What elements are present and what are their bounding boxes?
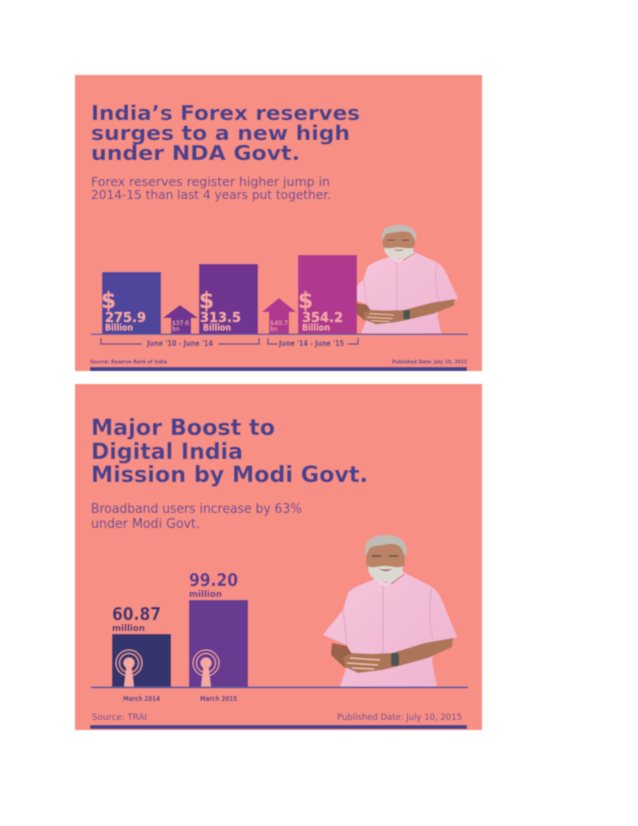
- panel: digital India: [75, 384, 482, 730]
- heading: forex reserves: surges to a new high: [91, 121, 350, 145]
- bar: 354.2 billion: 354.2: [302, 310, 343, 326]
- published date: digital India: Published Date: July 10, 2015: [337, 713, 462, 723]
- heading: digital India: Digital India: [91, 440, 243, 465]
- arrow: +$37.6 bn: [163, 305, 198, 334]
- subheading: digital India: Broadband users increase by 63%: [91, 502, 302, 517]
- icon: broadband tower: [193, 650, 219, 687]
- bar: 99.20 million, March 2015: 99.20: [189, 570, 238, 591]
- heading: digital India: [91, 416, 368, 488]
- axis label: March 2015: March 2015: [200, 695, 237, 703]
- bar: 60.87 million, March 2014: million: [112, 624, 145, 634]
- bar: 313.5 billion: Billion: [203, 324, 231, 334]
- heading: forex reserves: India’s Forex reserves: [91, 101, 360, 125]
- bar: 275.9 billion: [101, 272, 161, 334]
- bar: 60.87 million, March 2014: 60.87: [112, 604, 161, 625]
- footer bar: digital India: [90, 725, 467, 729]
- source note: forex: Source: Reserve Bank of India: [90, 360, 167, 366]
- arrow: +$40.7 bn: bn: [270, 326, 278, 333]
- bracket: June '14 - June '15: June '14 - June '15: [278, 339, 344, 348]
- heading: digital India: Mission by Modi Govt.: [91, 463, 368, 488]
- bracket: June '10 - June '14: June '10 - June '14: [146, 339, 213, 348]
- arrow: +$37.6 bn: $37.6: [172, 320, 189, 327]
- bar: 354.2 billion: [298, 255, 357, 334]
- published date: forex: Published Date: July 10, 2015: [392, 360, 467, 366]
- photo: Modi, forex panel: [347, 225, 458, 334]
- subheading: forex reserves: 2014-15 than last 4 years put together.: [91, 188, 331, 202]
- bar: 313.5 billion: [199, 264, 258, 334]
- icon: broadband tower: [116, 650, 142, 687]
- bar: 354.2 billion: $: [298, 289, 313, 314]
- heading: forex reserves: under NDA Govt.: [91, 141, 300, 165]
- bar: 60.87 million, March 2014: [112, 604, 171, 687]
- arrow: +$40.7 bn: $40.7: [270, 320, 288, 327]
- heading: forex reserves: [91, 101, 360, 165]
- bracket: June '10 - June '14: [101, 338, 259, 348]
- bar: 313.5 billion: 313.5: [200, 310, 241, 326]
- panel: forex reserves: [75, 75, 482, 371]
- subheading: forex reserves: Forex reserves register higher jump in: [91, 175, 330, 189]
- bar: 99.20 million, March 2015: [189, 570, 248, 687]
- bar: 275.9 billion: $: [101, 289, 116, 314]
- subheading: digital India: [91, 502, 302, 532]
- bar: 275.9 billion: 275.9: [105, 310, 146, 326]
- photo: Modi, digital India panel: [323, 535, 457, 686]
- footer bar: forex: [90, 367, 467, 371]
- bar: 275.9 billion: Billion: [105, 324, 133, 334]
- arrow: +$40.7 bn: [262, 298, 296, 334]
- bar: 354.2 billion: Billion: [302, 324, 330, 334]
- source note: digital India: Source: TRAI: [92, 713, 147, 723]
- heading: digital India: Major Boost to: [91, 416, 275, 441]
- arrow: +$37.6 bn: bn: [172, 326, 180, 333]
- subheading: digital India: under Modi Govt.: [91, 517, 200, 532]
- subheading: forex reserves: [91, 175, 331, 202]
- axis label: March 2014: March 2014: [123, 695, 160, 703]
- bar: 99.20 million, March 2015: million: [189, 590, 222, 600]
- bar: 313.5 billion: $: [199, 289, 214, 314]
